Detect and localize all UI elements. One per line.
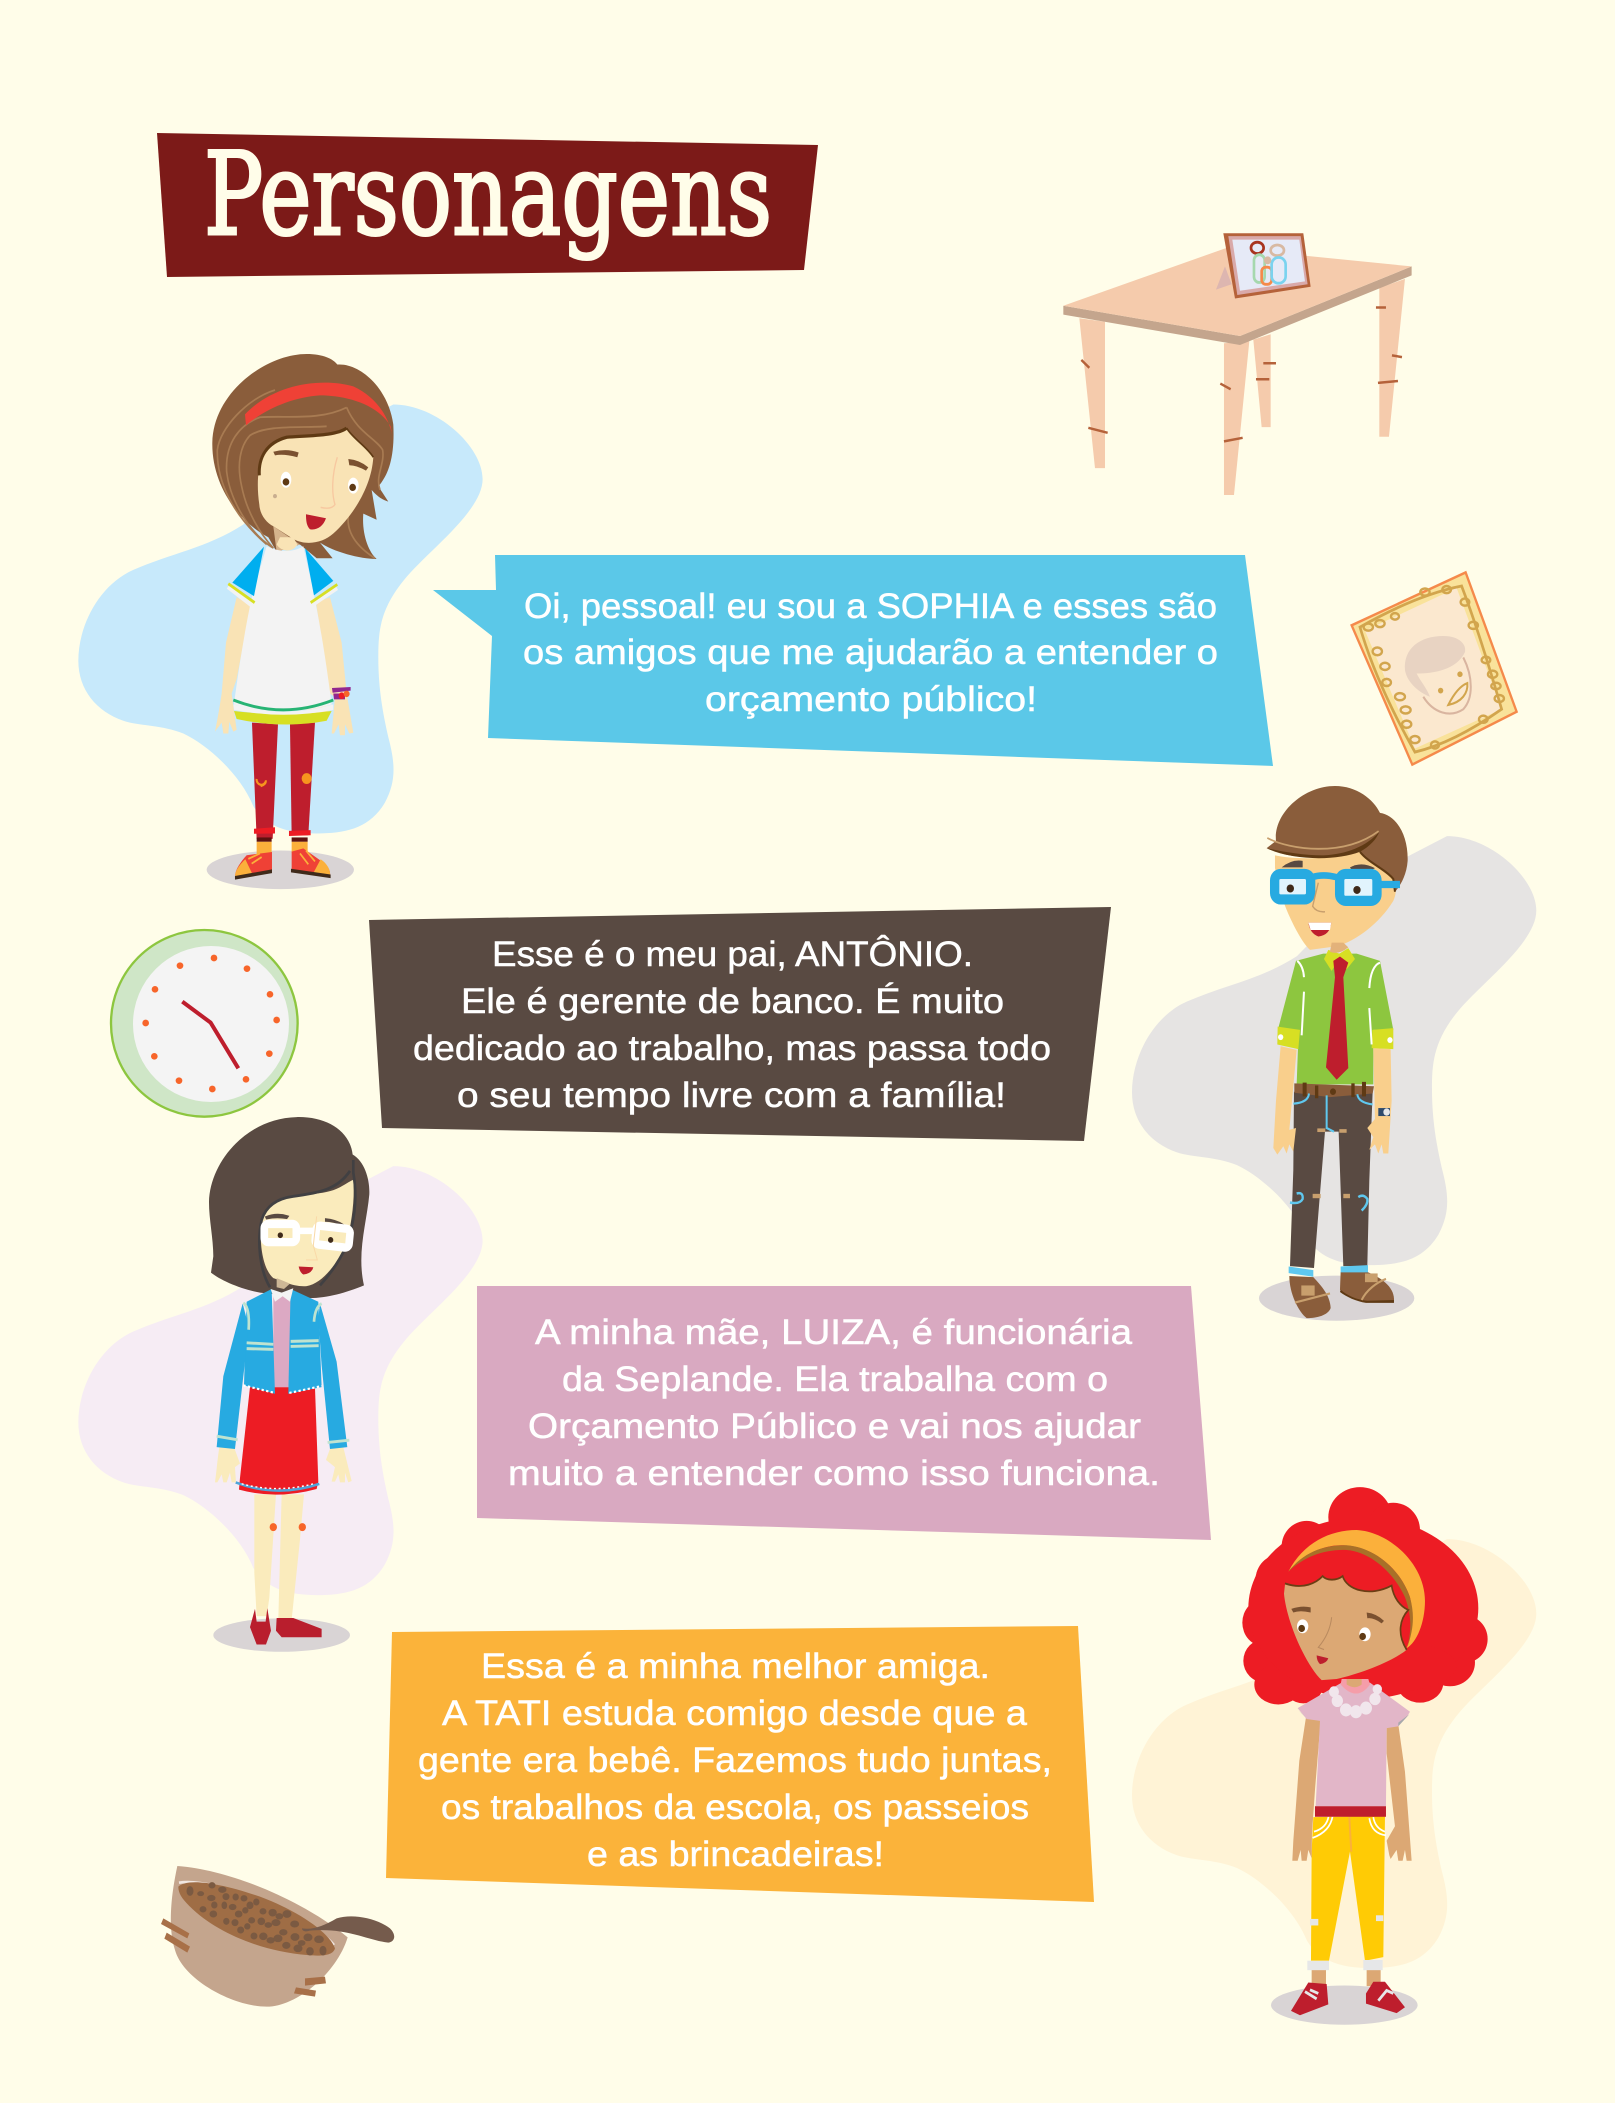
speech box: Luiza: da Seplande. Ela trabalha com o [562,1360,1108,1399]
arms [215,597,251,733]
speech box: Luiza [477,1286,1211,1540]
icon: table with family photo [1063,233,1412,495]
shirt [234,546,332,711]
background blob: Luiza [78,1166,483,1595]
title banner: Personagens [204,128,772,261]
shirt [1278,954,1393,1084]
hair [209,1117,369,1298]
collar and tie [1324,948,1355,971]
arms [1292,1713,1321,1861]
character: Sophia [78,354,483,889]
speech bubble: Sophia: os amigos que me ajudarão a entender o [523,633,1218,672]
speech bubble: Sophia [433,555,1273,766]
speech box: Luiza: A minha mãe, LUIZA, é funcionária [535,1313,1133,1352]
background blob: Sophia [78,405,483,833]
speech box: Luiza: Orçamento Público e vai nos ajudar [528,1407,1141,1446]
hair [1242,1487,1488,1704]
speech box: Antônio: o seu tempo livre com a família! [457,1076,1006,1115]
jacket [244,1289,275,1394]
speech box: Tati: gente era bebê. Fazemos tudo juntas, [418,1741,1052,1780]
icon: bowl with spoon [161,1866,394,2007]
speech box: Luiza: muito a entender como isso funciona. [508,1454,1160,1493]
speech box: Tati: e as brincadeiras! [587,1835,884,1874]
icon: wall portrait [1352,572,1517,765]
hands [215,1447,240,1482]
speech box: Antônio [369,907,1111,1141]
head [1275,852,1396,950]
bracelet [332,687,351,699]
trousers [1290,1092,1373,1268]
speech box: Tati: Essa é a minha melhor amiga. [481,1647,990,1686]
background blob: Tati [1132,1539,1536,1968]
speech box: Tati [386,1626,1094,1902]
character: Luiza [78,1117,483,1652]
speech box: Antônio: Esse é o meu pai, ANTÔNIO. [492,935,973,974]
speech box: Antônio: dedicado ao trabalho, mas passa todo [413,1029,1051,1068]
face [1284,1576,1408,1680]
speech bubble: Sophia: Oi, pessoal! eu sou a SOPHIA e esses são [524,587,1217,626]
character: Antônio [1132,786,1536,1321]
background blob: Antônio [1132,836,1536,1265]
legs and shoes [1312,1970,1326,1986]
face [261,1180,354,1286]
speech box: Antônio: Ele é gerente de banco. É muito [461,982,1004,1021]
speech box: Tati: os trabalhos da escola, os passeios [441,1788,1029,1827]
speech bubble: Sophia: orçamento público! [705,680,1037,719]
character: Tati [1132,1487,1536,2025]
legs [254,1494,276,1616]
face [258,428,373,543]
shirt [1298,1683,1410,1806]
belt [1294,1083,1374,1097]
blouse [273,1293,292,1387]
speech box: Tati: A TATI estuda comigo desde que a [442,1694,1028,1733]
icon: wall clock [111,930,298,1117]
headband [1288,1530,1425,1648]
skirt [239,1387,318,1495]
